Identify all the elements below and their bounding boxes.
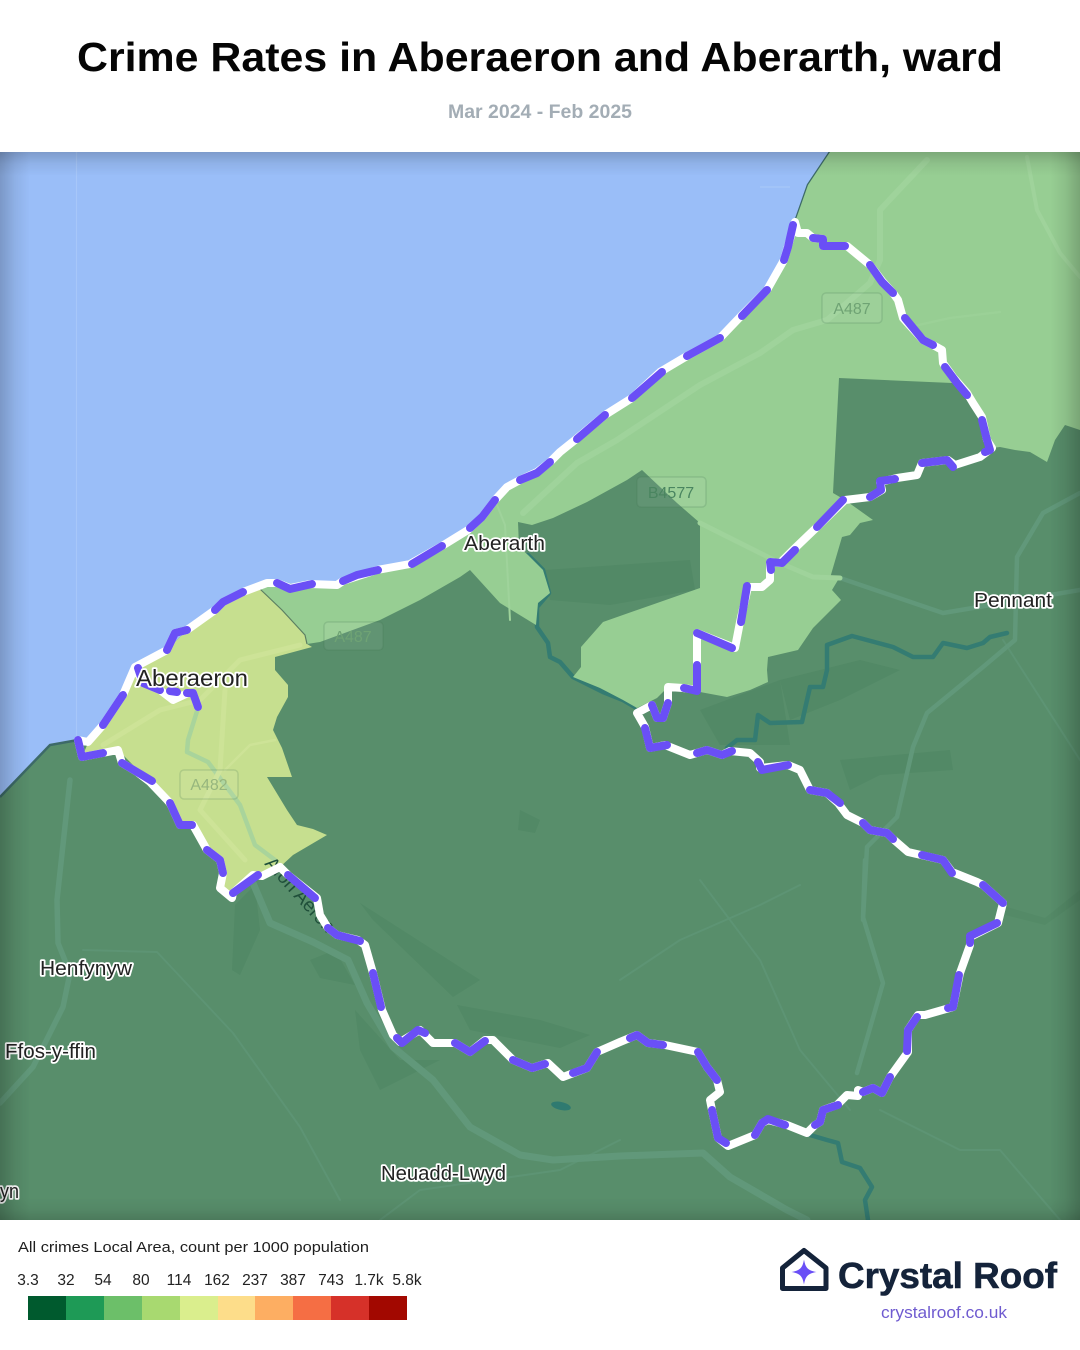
sea (0, 152, 828, 796)
road label: A487 west: A487 (334, 629, 372, 646)
website url: crystalroof.co.uk (881, 1303, 1008, 1322)
legend colour scale (28, 1296, 407, 1320)
place label: Pennant: Pennant (974, 590, 1052, 612)
road label: A482: A482 (190, 777, 228, 794)
land: dark green area (lowest crime band) (0, 378, 1080, 1220)
legend tick labels: 3.3 (17, 1272, 39, 1289)
legend tick labels: 80 (132, 1272, 150, 1289)
map panel (0, 152, 1080, 1220)
road label: A487 east (822, 293, 882, 323)
place label: clipped name at left edge: yn (0, 1181, 19, 1203)
coast edge strokes (0, 152, 830, 797)
place label: Aberaeron: Aberaeron (136, 665, 248, 691)
road label: B4577: B4577 (648, 485, 694, 502)
place label: Neuadd-Lwyd: Neuadd-Lwyd (381, 1163, 506, 1185)
legend tick labels: 32 (57, 1272, 75, 1289)
rivers (528, 555, 1007, 1220)
road label: B4577 (637, 477, 706, 507)
legend title: All crimes Local Area, count per 1000 population (18, 1239, 369, 1256)
legend tick labels: 54 (94, 1272, 112, 1289)
roads on light green area (508, 522, 842, 621)
roads on dark area (0, 493, 1080, 1220)
road label: A487 west (324, 622, 383, 650)
river label: Afon Aeron: Afon Aeron (260, 853, 339, 937)
legend tick labels: 114 (167, 1272, 192, 1289)
road label: A482 (180, 770, 238, 799)
place label: Aberarth: Aberarth (464, 533, 545, 555)
Aberaeron river and roads (184, 710, 277, 862)
title: Crime Rates in Aberaeron and Aberarth, ward (77, 34, 1003, 80)
woodland patches (232, 560, 1080, 1090)
subtitle: date range: Mar 2024 - Feb 2025 (448, 102, 632, 123)
logo wordmark: Crystal Roof (838, 1255, 1058, 1296)
ward boundary: white casing (78, 222, 1003, 1146)
light green area (low crime band) (260, 152, 1080, 708)
map edge vignette (0, 152, 1080, 1220)
legend tick labels: 743 (318, 1272, 344, 1289)
legend tick labels: 5.8k (392, 1272, 422, 1289)
legend tick labels: 237 (242, 1272, 268, 1289)
faint tile seam lines (76, 152, 790, 740)
yellow-green area: Aberaeron (moderate crime band) (82, 589, 327, 898)
place label: Ffos-y-ffin: Ffos-y-ffin (5, 1041, 96, 1063)
place label: Henfynyw: Henfynyw (40, 958, 133, 980)
legend tick labels (17, 1272, 422, 1289)
ward boundary: purple dashes (78, 225, 1003, 1143)
logo icon: house with star (782, 1250, 826, 1288)
legend tick labels: 1.7k (354, 1272, 384, 1289)
legend tick labels: 162 (204, 1272, 230, 1289)
legend tick labels: 387 (280, 1272, 306, 1289)
road label: A487 east: A487 (833, 301, 871, 318)
pond (551, 1102, 571, 1110)
yellow-green area boundary line (260, 589, 307, 644)
